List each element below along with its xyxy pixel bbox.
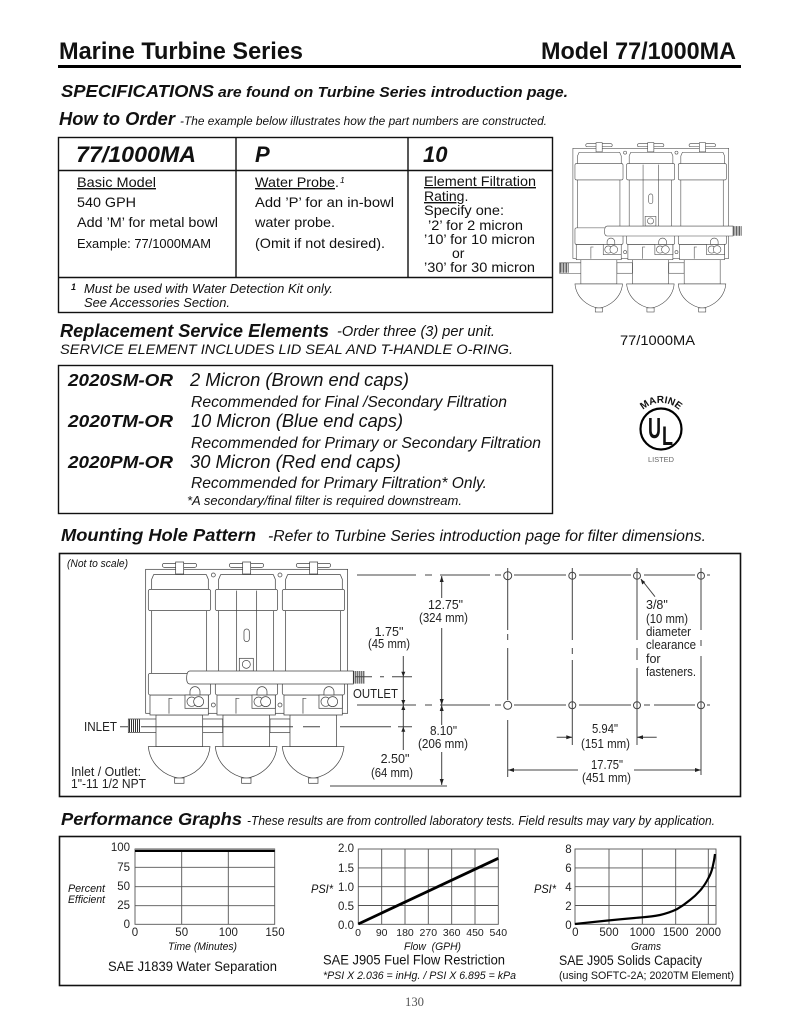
chart: solids capacity: 500 [599, 927, 619, 939]
chart: fuel flow restriction: 90 [376, 927, 388, 939]
labels: left dimensions [71, 625, 413, 791]
labels: right dimensions: (451 mm) [582, 771, 631, 785]
element 2020PM-OR: 2020PM-OR [67, 452, 173, 472]
chart: water separation: 25 [117, 900, 130, 912]
element 2020SM-OR: Recommended for Final /Secondary Filtration [191, 394, 507, 411]
heading: performance graphs [61, 809, 715, 829]
chart: fuel flow restriction: 1.5 [338, 863, 354, 875]
illustration: filter assembly small [560, 143, 742, 312]
column 1: basic model: Basic Model [77, 174, 156, 190]
column 3: element filtration rating [423, 142, 536, 275]
chart: water separation: 100 [111, 842, 130, 854]
icon: marine UL listed mark: LISTED [648, 455, 675, 464]
heading: how to order [59, 109, 547, 129]
chart: solids capacity: (using SOFTC-2A; 2020TM Element) [559, 970, 734, 982]
chart: fuel flow restriction: 0 [355, 927, 361, 939]
labels: right dimensions: 12.75" [428, 598, 463, 612]
heading: performance graphs: Performance Graphs [61, 809, 242, 829]
column 1: basic model: Add ’M’ for metal bowl [77, 214, 218, 230]
heading: specifications: are found on Turbine Series introduction page. [218, 84, 568, 101]
column 3: element filtration rating: or [452, 245, 465, 261]
column 1: basic model: 77/1000MA [76, 142, 196, 167]
callout: fastener clearance: diameter [646, 625, 691, 639]
element 2020TM-OR [67, 410, 541, 452]
heading: performance graphs: -These results are from controlled laboratory tests. Field results may vary by application. [247, 813, 715, 828]
labels: right dimensions [418, 598, 631, 785]
column 2: water probe [254, 142, 394, 251]
chart: water separation: 0 [124, 919, 130, 931]
labels: left dimensions: 2.50" [381, 752, 409, 766]
element 2020PM-OR [67, 451, 487, 492]
callout: fastener clearance: for [646, 652, 661, 666]
title: Model 77/1000MA: Model 77/1000MA [541, 38, 736, 65]
page number: 130 [405, 995, 424, 1009]
heading: how to order: How to Order [59, 109, 176, 129]
labels: left dimensions: (64 mm) [371, 766, 413, 780]
note: secondary filter: *A secondary/final filter is required downstream. [187, 494, 462, 508]
labels: left dimensions: (45 mm) [368, 637, 410, 651]
chart: solids capacity: 4 [565, 882, 572, 894]
callout: fastener clearance: clearance [646, 638, 696, 652]
icon: marine UL listed mark: MARINE [640, 396, 683, 410]
labels: left dimensions: 1.75" [375, 625, 403, 639]
heading: replacement service elements: -Order three (3) per unit. [337, 324, 495, 340]
chart: fuel flow restriction: Flow (GPH) [404, 941, 461, 953]
chart: fuel flow restriction: 450 [466, 927, 484, 939]
column 2: water probe: water probe. [254, 214, 335, 230]
chart: water separation: Percent [68, 883, 106, 895]
labels: right dimensions: 17.75" [591, 758, 623, 772]
labels: right dimensions: (151 mm) [581, 737, 630, 751]
chart: water separation: 50 [175, 927, 188, 939]
column 2: water probe: (Omit if not desired). [255, 235, 385, 251]
element 2020SM-OR: 2 Micron (Brown end caps) [189, 369, 409, 390]
column 3: element filtration rating: ’2’ for 2 micron [428, 217, 523, 233]
illustration: filter assembly large [128, 562, 365, 783]
chart: fuel flow restriction: 0.5 [338, 901, 354, 913]
chart: fuel flow restriction: 540 [490, 927, 507, 939]
callout: fastener clearance: (10 mm) [646, 612, 688, 626]
icon: marine UL listed mark: L [662, 421, 673, 451]
heading: replacement service elements: SERVICE ELEMENT INCLUDES LID SEAL AND T-HANDLE O-RING. [60, 341, 513, 357]
chart: fuel flow restriction: 180 [396, 927, 414, 939]
column 3: element filtration rating: ’30’ for 30 micron [424, 259, 535, 275]
element 2020PM-OR: Recommended for Primary Filtration* Only. [191, 475, 487, 492]
column 2: water probe: Add ’P’ for an in-bowl [255, 194, 394, 210]
note: not to scale: (Not to scale) [67, 558, 128, 570]
element 2020SM-OR [67, 369, 507, 411]
element 2020TM-OR: 2020TM-OR [67, 411, 173, 431]
heading: mounting hole pattern: -Refer to Turbine Series introduction page for filter dimensions. [268, 528, 706, 545]
icon: marine UL listed mark: U [648, 413, 661, 445]
labels: right dimensions: (206 mm) [418, 737, 468, 751]
column 2: water probe: P [255, 142, 270, 167]
chart: fuel flow restriction: 0.0 [338, 920, 354, 932]
footnote: Must be used with Water Detection Kit only. [84, 281, 333, 296]
heading: replacement service elements: Replacement Service Elements [60, 321, 329, 341]
chart: solids capacity: 1500 [663, 927, 688, 939]
column 3: element filtration rating: ’10’ for 10 micron [424, 231, 535, 247]
chart: water separation: 50 [117, 881, 130, 893]
footnote [71, 281, 333, 310]
chart: solids capacity: PSI* [534, 884, 556, 896]
labels: right dimensions: (324 mm) [419, 611, 468, 625]
chart: solids capacity [534, 844, 734, 982]
heading: replacement service elements [60, 321, 513, 357]
column 3: element filtration rating: Element Filtration [424, 173, 536, 189]
footnote: See Accessories Section. [84, 295, 230, 310]
column 1: basic model: Example: 77/1000MAM [77, 237, 211, 251]
column 3: element filtration rating: Rating. [424, 188, 468, 204]
panel: mounting diagram [60, 554, 740, 796]
element 2020TM-OR: 10 Micron (Blue end caps) [191, 410, 403, 431]
chart: solids capacity: 0 [565, 920, 572, 932]
heading: mounting hole pattern [61, 525, 706, 545]
panel: replacement elements table [58, 366, 552, 514]
chart: solids capacity: 0 [572, 927, 579, 939]
chart: fuel flow restriction: 360 [443, 927, 461, 939]
heading: mounting hole pattern: Mounting Hole Pattern [61, 525, 256, 545]
chart: water separation: Time (Minutes) [168, 941, 237, 953]
title: Marine Turbine Series: Marine Turbine Series [59, 38, 303, 65]
chart: fuel flow restriction: *PSI X 2.036 = inHg. / PSI X 6.895 = kPa [323, 970, 516, 982]
chart: solids capacity: Grams [631, 941, 661, 953]
column 3: element filtration rating: Specify one: [424, 202, 504, 218]
chart: solids capacity: 8 [565, 844, 572, 856]
icon: marine UL listed mark [639, 396, 683, 464]
column 1: basic model: 540 GPH [77, 194, 136, 210]
labels: left dimensions: OUTLET [353, 686, 398, 701]
heading: how to order: -The example below illustrates how the part numbers are constructed. [180, 114, 547, 128]
chart: water separation: 75 [117, 862, 130, 874]
element 2020PM-OR: 30 Micron (Red end caps) [190, 451, 401, 472]
column 1: basic model [76, 142, 218, 251]
heading: specifications [61, 81, 568, 101]
labels: left dimensions: 1"-11 1/2 NPT [71, 777, 146, 791]
chart: water separation: 0 [132, 927, 138, 939]
chart: water separation: 150 [265, 927, 285, 939]
chart: water separation: SAE J1839 Water Separation [108, 959, 277, 974]
footnote: 1 [71, 282, 76, 292]
chart: fuel flow restriction: PSI* [311, 884, 333, 896]
panel: performance graphs [60, 836, 740, 986]
callout: fastener clearance: fasteners. [646, 665, 696, 679]
mounting holes [504, 572, 704, 709]
chart: fuel flow restriction: 270 [420, 927, 437, 939]
dimension lines [120, 568, 710, 786]
chart: fuel flow restriction: SAE J905 Fuel Flow Restriction [323, 952, 505, 968]
element 2020TM-OR: Recommended for Primary or Secondary Filtration [191, 435, 541, 452]
chart: solids capacity: 6 [565, 863, 572, 875]
column 2: water probe: . [335, 174, 339, 190]
chart: fuel flow restriction: 2.0 [338, 843, 354, 855]
chart: fuel flow restriction [311, 843, 516, 982]
labels: right dimensions: 5.94" [592, 722, 618, 736]
column 2: water probe: 1 [340, 175, 345, 185]
chart: water separation: Efficient [68, 894, 106, 906]
chart: fuel flow restriction: 1.0 [338, 882, 354, 894]
labels: left dimensions: INLET [84, 719, 117, 734]
column 3: element filtration rating: 10 [423, 142, 448, 167]
chart: solids capacity: 1000 [630, 927, 655, 939]
labels: left dimensions: Inlet / Outlet: [71, 765, 141, 779]
labels: right dimensions: 8.10" [430, 724, 457, 738]
chart: water separation: 100 [219, 927, 238, 939]
chart: solids capacity: 2 [565, 901, 572, 913]
chart: water separation [68, 842, 285, 974]
panel: part number table [58, 137, 553, 312]
element 2020SM-OR: 2020SM-OR [67, 370, 173, 390]
heading: specifications: SPECIFICATIONS [61, 81, 214, 101]
caption: model number: 77/1000MA [620, 332, 696, 348]
callout: fastener clearance [646, 598, 696, 679]
chart: solids capacity: SAE J905 Solids Capacity [559, 953, 702, 968]
callout: fastener clearance: 3/8" [646, 598, 668, 612]
column 2: water probe: Water Probe [255, 174, 335, 190]
chart: solids capacity: 2000 [696, 927, 721, 939]
